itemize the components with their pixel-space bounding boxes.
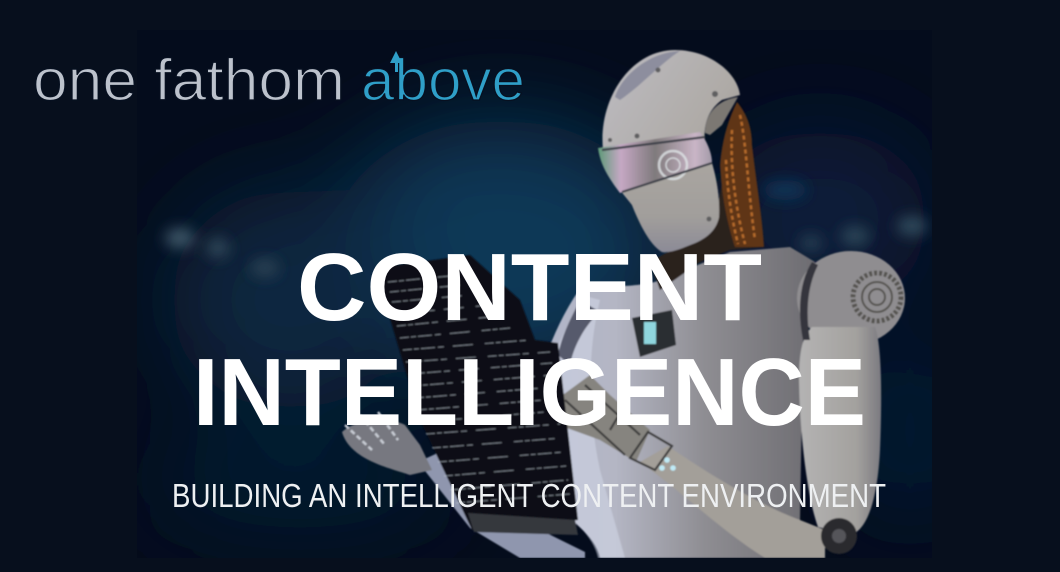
logo wordmark blue: above: [361, 48, 525, 113]
lower face: [622, 163, 719, 252]
panel backdrop: [137, 30, 932, 558]
torso: [550, 246, 816, 558]
text lines on sheet: [388, 276, 570, 503]
blurred background lights: [165, 180, 927, 277]
shoulder gap: [800, 262, 818, 340]
mechanical wrist: [556, 375, 650, 462]
visor lens ring: [659, 151, 687, 179]
blue background glow: [150, 120, 970, 530]
logo arrow: [390, 51, 402, 72]
shoulder gear: [853, 273, 901, 321]
photo panel: robot reading a data sheet: [137, 30, 970, 558]
upper arm: [799, 327, 881, 535]
wrist glow dots: [659, 457, 676, 471]
title line 1: CONTENT: [297, 234, 762, 341]
title: [193, 234, 866, 446]
visor: [598, 132, 712, 193]
infographic cover: [36, 49, 932, 558]
chest device: [632, 310, 676, 357]
head: [602, 50, 740, 252]
visor bands: [602, 137, 712, 192]
head top panel: [615, 51, 680, 100]
robot hand: [342, 412, 432, 475]
head rivets: [608, 68, 718, 222]
copper cables: [720, 102, 764, 247]
lower hand joint: [821, 518, 857, 554]
left forearm: [418, 452, 585, 558]
wrist joint lines: [565, 385, 672, 470]
crossing forearm: [640, 446, 825, 558]
subtitle: BUILDING AN INTELLIGENT CONTENT ENVIRONMENT: [172, 477, 886, 514]
title line 2: INTELLIGENCE: [193, 339, 866, 446]
logo: one fathom above: [33, 48, 525, 113]
robot figure: [342, 50, 905, 558]
shoulder shadow under title: [558, 305, 597, 360]
shoulder: [797, 251, 905, 345]
logo wordmark grey: one fathom: [33, 48, 345, 113]
data sheet: [375, 255, 578, 535]
chest highlight: [558, 298, 625, 558]
side head recess: [705, 97, 738, 135]
neck wiring: [650, 102, 764, 290]
